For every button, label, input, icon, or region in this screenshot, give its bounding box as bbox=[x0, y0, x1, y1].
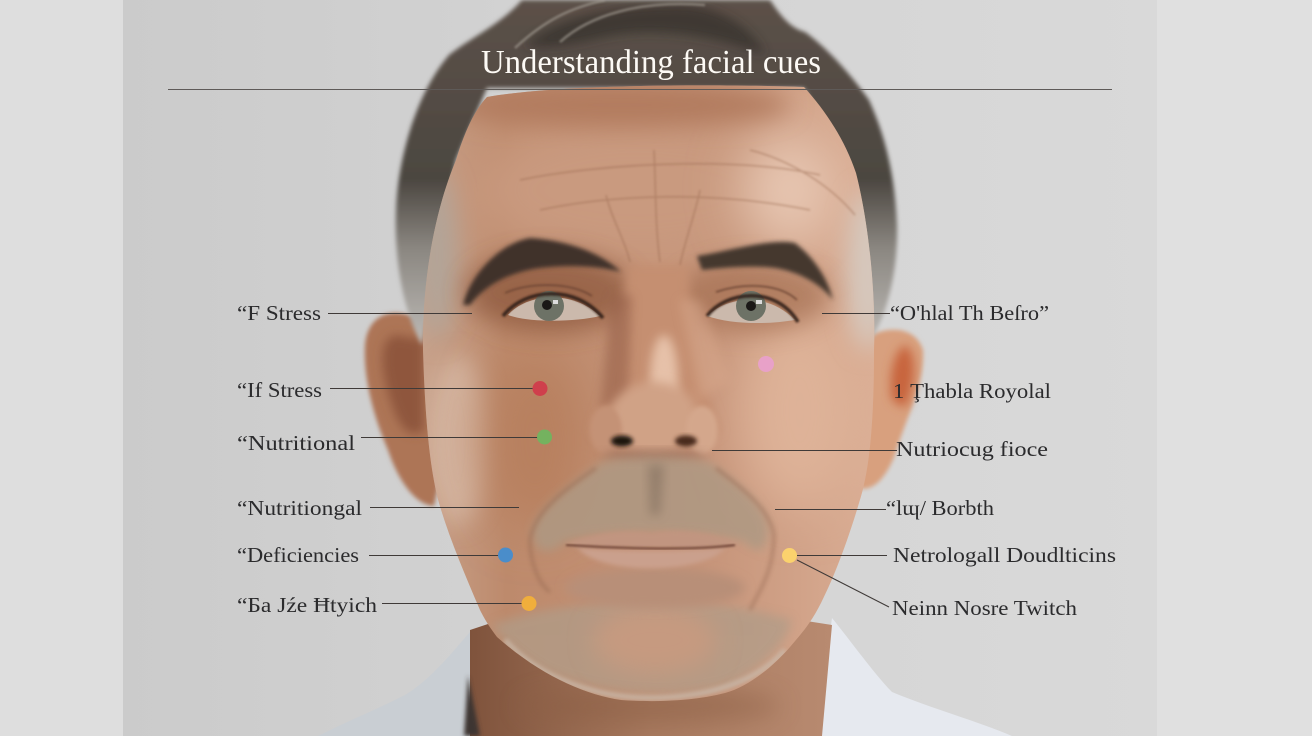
label: If Stress bbox=[237, 378, 548, 402]
shirt bbox=[318, 618, 1012, 736]
label: Netrologall Doudlticins: Netrologall Doudlticins bbox=[893, 543, 1116, 567]
label: Deficiencies bbox=[237, 543, 513, 567]
right eye bbox=[707, 286, 798, 323]
label: Nutritional: “Nutritional bbox=[237, 431, 355, 455]
right labels bbox=[712, 301, 1116, 620]
label: F Stress: “F Stress bbox=[237, 301, 321, 325]
gray sideburn blend left bbox=[417, 170, 457, 340]
label: Ohlal Th Befro: “O'hlal Th Beſro” bbox=[890, 301, 1049, 325]
right cheek highlight bbox=[729, 328, 839, 504]
hair bbox=[396, 0, 897, 345]
nasolabial folds bbox=[530, 468, 774, 610]
left ear bbox=[365, 313, 450, 506]
label: Ba Jze Ttyich: “Бa Jźe Ħtyich bbox=[237, 593, 378, 617]
label: Neinn Nosre Twitch: Neinn Nosre Twitch bbox=[892, 596, 1078, 620]
nose tip and wings bbox=[590, 382, 718, 462]
lips bbox=[566, 531, 738, 568]
label: Netrologall Doudlticins bbox=[782, 543, 1116, 567]
label: IJ Borbth: “lɰ/ Borbth bbox=[886, 496, 995, 520]
title rule bbox=[168, 88, 1112, 90]
label: If Stress: “If Stress bbox=[237, 378, 322, 402]
label: Neinn Nosre Twitch bbox=[797, 560, 1078, 620]
gray sideburn blend right bbox=[846, 190, 890, 350]
label: Nutritiongal: “Nutritiongal bbox=[237, 496, 362, 520]
pale cheek left bbox=[426, 355, 490, 525]
label: Thabla Royolal: 1 Ţhabla Royolal bbox=[893, 379, 1051, 403]
label: Ba Jze Ttyich bbox=[237, 593, 536, 617]
forehead tone bbox=[487, 132, 682, 256]
face bbox=[410, 80, 890, 710]
infographic canvas bbox=[123, 0, 1116, 736]
title: Understanding facial cues bbox=[481, 44, 821, 81]
right ear bbox=[850, 330, 923, 489]
eye socket shadows bbox=[465, 252, 635, 332]
portrait photo illustration bbox=[318, 0, 1012, 736]
label: Nutriocug fioce: Nutriocug fioce bbox=[896, 437, 1048, 461]
pink marker bbox=[758, 356, 774, 372]
bridge of nose bbox=[622, 271, 705, 404]
label: Nutritional bbox=[237, 430, 552, 455]
lower face and chin stubble bbox=[492, 600, 792, 694]
moustache stubble bbox=[532, 457, 768, 551]
collar shadow bbox=[464, 675, 480, 736]
left eyebrow bbox=[463, 238, 621, 305]
right eyebrow bbox=[697, 242, 833, 300]
left cheek shade bbox=[485, 350, 585, 530]
label: Deficiencies: “Deficiencies bbox=[237, 543, 359, 567]
forehead furrows bbox=[520, 150, 855, 265]
left labels bbox=[237, 301, 552, 617]
left eye bbox=[503, 285, 603, 321]
neck bbox=[470, 620, 832, 736]
